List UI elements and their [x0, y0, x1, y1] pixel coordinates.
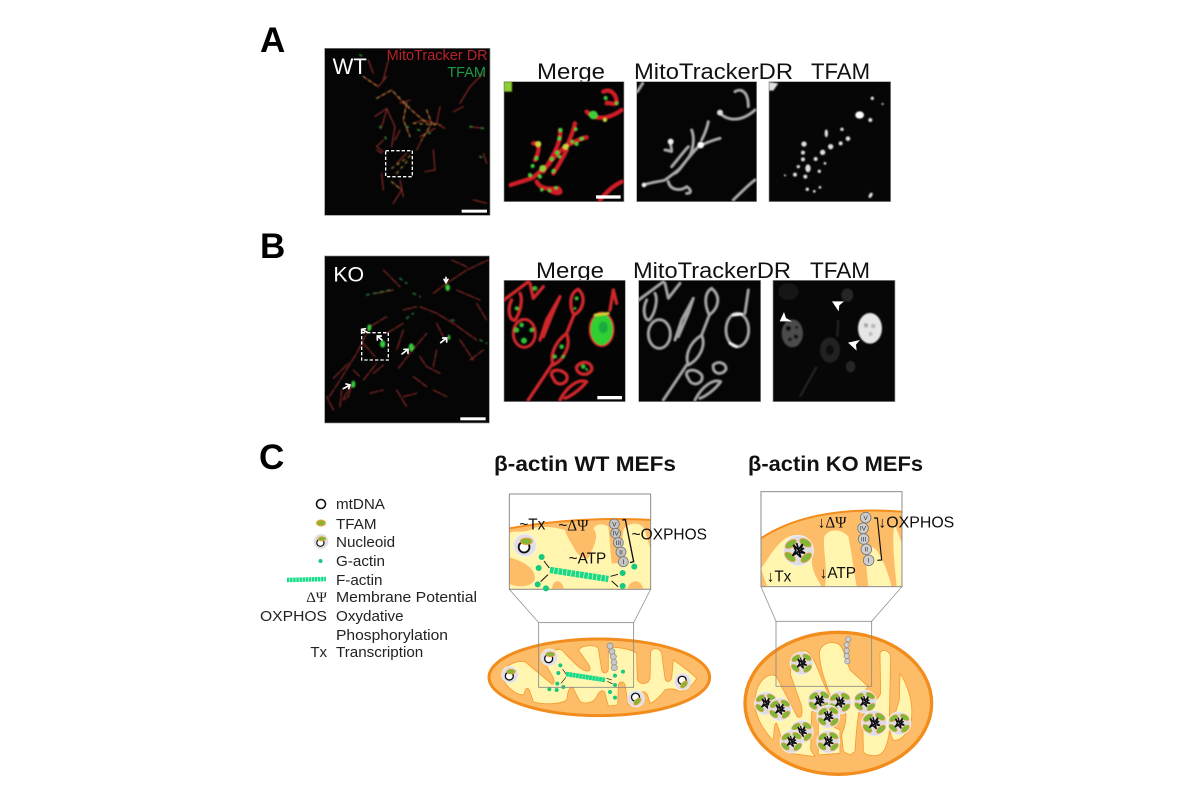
legend labels: Nucleoid	[336, 534, 395, 551]
inset labels: ~Tx	[519, 516, 546, 533]
legend icon: TFAM	[316, 520, 326, 526]
label: KO: KO	[333, 263, 364, 287]
complexes I to V: III	[616, 540, 621, 547]
column heading: TFAM (A): TFAM	[811, 59, 870, 84]
complexes I to V	[858, 512, 874, 566]
white arrows marking nucleoids	[343, 277, 448, 389]
heading: WT MEFs: β-actin WT MEFs	[494, 453, 676, 476]
column heading: MitoTrackerDR (B): MitoTrackerDR	[633, 258, 791, 283]
F-actin and G-actin	[535, 554, 637, 591]
legend icon: F-actin	[287, 579, 326, 580]
column heading: Merge (A): Merge	[537, 59, 605, 84]
micrograph: KO TFAM	[773, 280, 895, 402]
micrograph: WT TFAM	[769, 82, 891, 202]
panel letter A: A	[260, 21, 285, 60]
legend labels: G-actin	[336, 553, 385, 570]
column heading: MitoTrackerDR (A): MitoTrackerDR	[634, 59, 793, 84]
inset labels: ↓OXPHOS	[878, 514, 954, 531]
scale bar	[597, 396, 622, 399]
legend icon: mtDNA	[316, 500, 326, 508]
nucleoids in organelle	[502, 649, 694, 710]
complexes I to V: III	[861, 536, 867, 543]
legend symbol: delta psi: ΔΨ	[306, 590, 328, 606]
scale bar	[460, 417, 486, 420]
bracket	[874, 518, 882, 560]
inset labels: ~ATP	[569, 550, 606, 567]
region of interest box	[362, 333, 388, 360]
diagram: KO mitochondrion	[745, 492, 954, 774]
scale bar	[596, 195, 621, 199]
label: WT: WT	[333, 54, 367, 79]
micrograph: WT overview	[325, 48, 490, 215]
micrograph: KO MitoTrackerDR	[639, 280, 761, 402]
region of interest box	[386, 151, 412, 177]
inset labels: ↓ΔΨ	[818, 515, 847, 532]
legend symbol: OXPHOS: OXPHOS	[260, 608, 327, 625]
inset labels: ~ΔΨ	[558, 518, 589, 535]
zoom connector lines	[509, 589, 651, 623]
complexes I to V: V	[863, 515, 868, 522]
micrograph: KO merge	[504, 280, 625, 402]
inset labels: ~OXPHOS	[632, 526, 707, 543]
complexes I to V: II	[619, 549, 623, 556]
micrograph: WT MitoTrackerDR	[637, 82, 757, 202]
nucleoid	[783, 536, 813, 566]
scale bar	[462, 210, 487, 213]
column heading: TFAM (B): TFAM	[810, 258, 870, 283]
WT inset	[509, 494, 707, 591]
nucleoid clusters	[754, 652, 911, 753]
legend labels: mtDNA	[336, 496, 386, 513]
respiratory chain	[844, 637, 851, 664]
nucleoid	[514, 534, 536, 557]
legend labels: Transcription	[336, 644, 423, 661]
complexes I to V: II	[864, 547, 868, 554]
inset labels: ↓Tx	[767, 568, 792, 585]
legend labels: Phosphorylation	[336, 627, 448, 644]
legend icon: Nucleoid	[314, 534, 328, 549]
region box	[539, 623, 634, 687]
panel letter C: C	[259, 438, 284, 477]
label: MitoTracker DR: MitoTracker DR	[387, 48, 488, 64]
legend labels: Membrane Potential	[336, 589, 477, 606]
whole mitochondrion	[489, 639, 710, 716]
white arrowheads	[780, 301, 860, 351]
zoom connector lines	[761, 587, 902, 621]
legend labels	[336, 496, 477, 661]
micrograph: KO overview	[325, 256, 489, 423]
legend labels: TFAM	[336, 516, 376, 533]
legend symbol: Tx: Tx	[310, 644, 327, 661]
legend labels: F-actin	[336, 572, 382, 589]
complexes I to V: I	[622, 559, 624, 566]
legend labels: Oxydative	[336, 608, 404, 625]
complexes I to V: I	[868, 558, 870, 565]
label: TFAM: TFAM	[447, 65, 486, 81]
micrograph: WT merge	[504, 82, 624, 202]
complexes I to V: IV	[613, 531, 619, 538]
diagram: WT mitochondrion	[489, 494, 710, 716]
whole mitochondrion	[745, 632, 932, 774]
complexes I to V	[609, 519, 628, 567]
legend icon: G-actin	[318, 559, 322, 563]
respiratory chain	[607, 643, 617, 671]
actin filament	[547, 663, 625, 700]
panel letter B: B	[260, 227, 285, 266]
inset labels	[519, 516, 707, 567]
inset labels: ↓ATP	[820, 565, 856, 582]
bracket	[622, 520, 634, 563]
complexes I to V: IV	[860, 526, 867, 533]
KO inset	[761, 492, 954, 587]
heading: KO MEFs: β-actin KO MEFs	[748, 453, 923, 476]
inset labels	[767, 514, 954, 585]
complexes I to V: V	[612, 521, 617, 528]
region box	[776, 621, 872, 686]
legend	[260, 496, 477, 661]
column heading: Merge (B): Merge	[536, 258, 604, 283]
